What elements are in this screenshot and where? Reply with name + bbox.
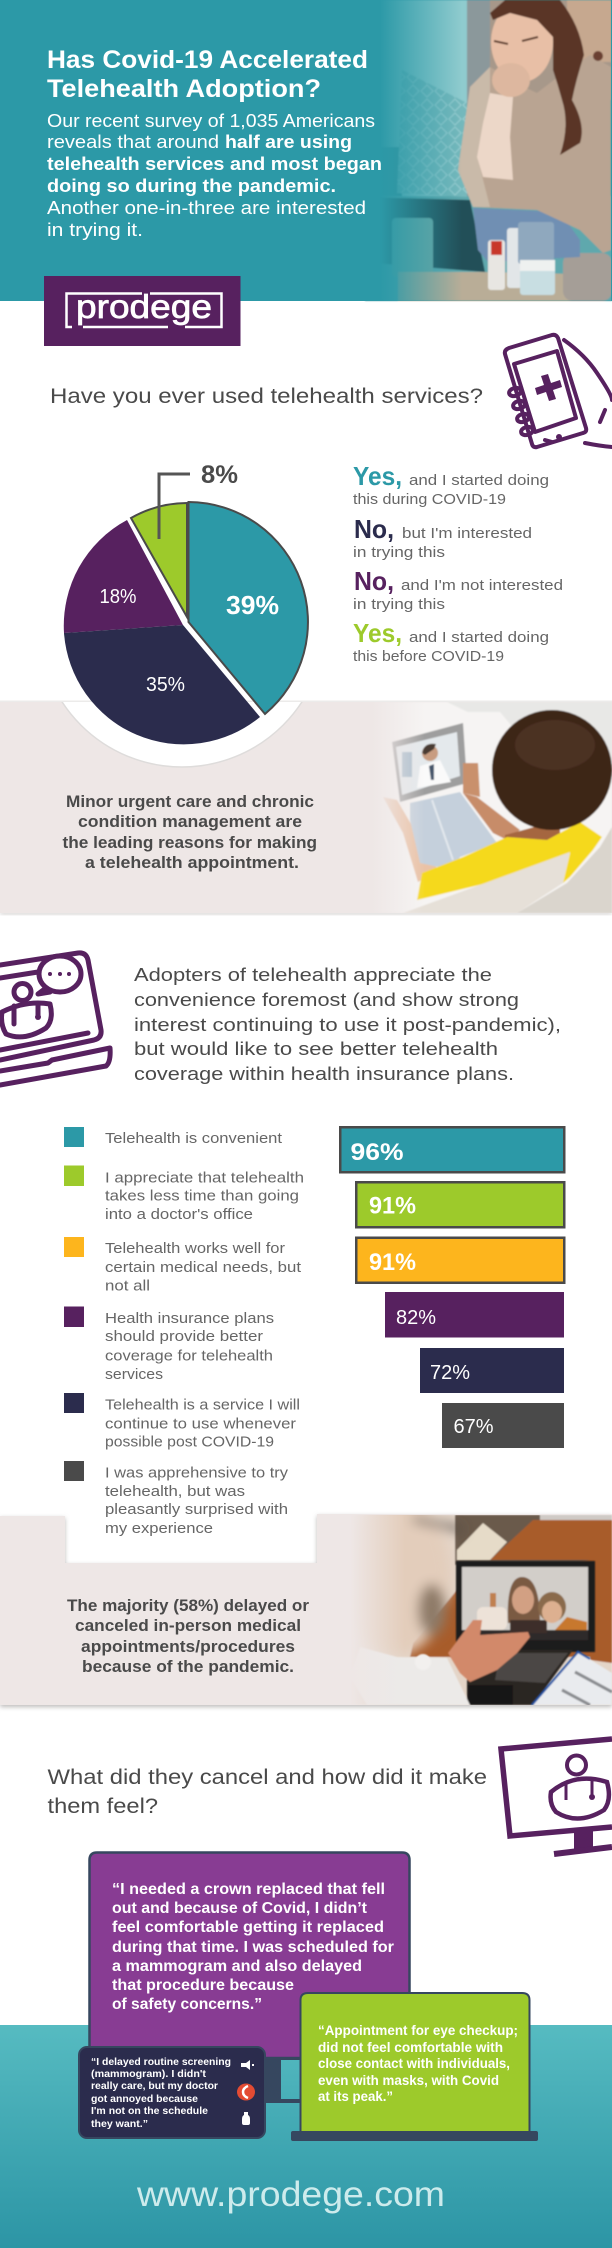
device: navy phone quote [79, 2047, 265, 2138]
callout text: The majority (58%) delayed or [67, 1596, 309, 1615]
photo: doctor on video call [360, 1515, 612, 1705]
bar chart legend: I was apprehensive to try [105, 1464, 289, 1482]
website url: www.prodege.com [136, 2175, 445, 2214]
blurred foreground doctor's head [370, 1515, 456, 1656]
bar chart legend: continue to use whenever [105, 1416, 296, 1432]
white cut-out behind pie [62, 702, 302, 768]
device: green laptop quote: at its peak.” [318, 2088, 393, 2104]
bar chart: 72% [430, 1362, 470, 1384]
device: purple monitor quote: that procedure because [112, 1977, 294, 1994]
footer teal band [0, 2025, 612, 2248]
device: purple monitor quote: out and because of Covid, I didn’t [112, 1900, 368, 1917]
title [47, 46, 368, 103]
bar chart legend: telehealth, but was [105, 1483, 245, 1500]
bar chart: 91% [369, 1192, 416, 1220]
device: purple monitor quote: during that time. I was scheduled for [112, 1939, 394, 1956]
device: navy phone quote: they want.” [91, 2118, 148, 2130]
device: navy phone quote: got annoyed because [91, 2093, 198, 2105]
pie legend: No, [354, 566, 394, 596]
icon: microphone [242, 2112, 250, 2125]
pie legend: in trying this [353, 544, 445, 561]
bar chart legend: pleasantly surprised with [105, 1501, 288, 1518]
device: green laptop quote: close contact with individuals, [318, 2055, 510, 2071]
bar chart legend: takes less time than going [105, 1188, 299, 1204]
callout text [67, 1596, 309, 1676]
header banner [0, 0, 612, 301]
pie legend: and I'm not interested [401, 577, 563, 594]
heading: what did they cancel: them feel? [48, 1795, 158, 1818]
logo: prodege [44, 276, 240, 346]
pie chart: 18% [100, 586, 137, 608]
bar chart legend: should provide better [105, 1328, 263, 1345]
intro text: in trying it. [47, 219, 143, 240]
paragraph: adopters of telehealth [134, 965, 561, 1084]
bar chart legend: possible post COVID-19 [105, 1434, 274, 1450]
monitor stand [262, 2057, 305, 2103]
pie legend: in trying this [353, 596, 445, 613]
pie legend [353, 461, 563, 665]
device: purple monitor quote: a mammogram and also delayed [112, 1958, 362, 1975]
intro text [47, 110, 382, 240]
bar chart legend: services [105, 1366, 163, 1383]
device: navy phone quote: “I delayed routine screening [91, 2056, 231, 2068]
callout text: appointments/procedures [81, 1637, 295, 1656]
icon: laptop with doctor and chat bubble [0, 953, 110, 1085]
bar chart [340, 1127, 564, 1448]
paragraph: adopters of telehealth: but would like to see better telehealth [134, 1039, 498, 1059]
pie legend: Yes, [353, 618, 402, 648]
pie legend: and I started doing [409, 629, 549, 646]
bar chart: 67% [454, 1416, 494, 1438]
bar chart: 82% [396, 1307, 436, 1329]
heading: what did they cancel: What did they cancel and how did it make [48, 1766, 487, 1789]
intro text: telehealth services and most began [47, 153, 382, 174]
title: Telehealth Adoption? [47, 75, 321, 103]
paragraph: adopters of telehealth: coverage within health insurance plans. [134, 1064, 514, 1084]
icon: red hang-up button [237, 2084, 255, 2100]
pie chart [64, 461, 308, 744]
device: green laptop quote [291, 1993, 538, 2141]
bar chart legend: into a doctor's office [105, 1206, 253, 1223]
pie legend: and I started doing [409, 472, 549, 489]
device: purple monitor quote: feel comfortable getting it replaced [112, 1919, 384, 1936]
bar chart legend: I appreciate that telehealth [105, 1170, 304, 1186]
pie legend: Yes, [353, 461, 402, 491]
device: navy phone quote: really care, but my doctor [91, 2080, 218, 2092]
pie chart: 39% [226, 590, 279, 620]
paragraph: adopters of telehealth: Adopters of telehealth appreciate the [134, 965, 492, 985]
device: green laptop quote: “Appointment for eye checkup; [318, 2022, 518, 2038]
bar chart: 96% [350, 1139, 404, 1166]
callout text [62, 792, 317, 872]
device: purple monitor quote: “I needed a crown replaced that fell [112, 1881, 385, 1898]
heading: what did they cancel [48, 1766, 487, 1818]
paragraph: adopters of telehealth: convenience foremost (and show strong [134, 990, 519, 1010]
photo: woman on tablet video call [365, 702, 612, 913]
device: green laptop quote: even with masks, with Covid [318, 2072, 499, 2088]
callout text: Minor urgent care and chronic [66, 792, 314, 811]
bar chart: 91% [369, 1249, 416, 1276]
hero photo: woman coughing [365, 0, 612, 301]
device: purple monitor quote [90, 1852, 410, 2103]
pie legend: No, [354, 514, 394, 544]
device: green laptop quote: did not feel comfortable with [318, 2039, 503, 2055]
pie chart: 8% [201, 461, 238, 489]
intro text: Another one-in-three are interested [47, 197, 366, 218]
intro text: reveals that around [47, 131, 219, 152]
device: purple monitor quote: of safety concerns.” [112, 1996, 262, 2013]
heading: have you ever used telehealth: Have you ever used telehealth services? [50, 385, 483, 408]
paragraph: adopters of telehealth: interest continuing to use it post-pandemic), [134, 1015, 561, 1035]
bar chart legend: my experience [105, 1520, 213, 1537]
pie chart: 35% [146, 674, 185, 696]
device: navy phone quote: (mammogram). I didn't [91, 2068, 206, 2080]
panel: majority delayed or canceled [0, 1495, 612, 1707]
callout text: because of the pandemic. [82, 1657, 294, 1676]
intro text: half are using [225, 131, 352, 152]
callout text: the leading reasons for making [62, 833, 317, 852]
leader line [159, 474, 190, 539]
panel: minor urgent care [0, 700, 612, 916]
bar chart legend: Telehealth is convenient [105, 1130, 283, 1147]
bar chart legend: Telehealth is a service I will [105, 1396, 300, 1414]
pie legend: this before COVID-19 [353, 648, 504, 665]
pie legend: this during COVID-19 [353, 491, 506, 508]
bar chart legend: Health insurance plans [105, 1310, 274, 1327]
intro text: Our recent survey of 1,035 Americans [47, 110, 375, 131]
intro text: doing so during the pandemic. [47, 175, 336, 196]
bar chart legend: certain medical needs, but [105, 1259, 302, 1276]
bar chart legend: coverage for telehealth [105, 1348, 273, 1364]
device: navy phone quote: I'm not on the schedule [91, 2105, 208, 2117]
icon: speaker [241, 2060, 254, 2070]
icon: hand holding phone with cross [505, 335, 612, 447]
bar chart legend: not all [105, 1278, 150, 1294]
bar chart legend: Telehealth works well for [105, 1240, 285, 1257]
callout text: a telehealth appointment. [85, 853, 299, 872]
callout text: canceled in-person medical [75, 1616, 301, 1635]
logo: prodege: prodege [76, 288, 212, 325]
pie legend: but I'm interested [402, 525, 532, 542]
icon: monitor with doctor [501, 1739, 612, 1854]
title: Has Covid-19 Accelerated [47, 46, 368, 74]
bar chart legend [64, 1127, 304, 1537]
callout text: condition management are [78, 812, 302, 831]
